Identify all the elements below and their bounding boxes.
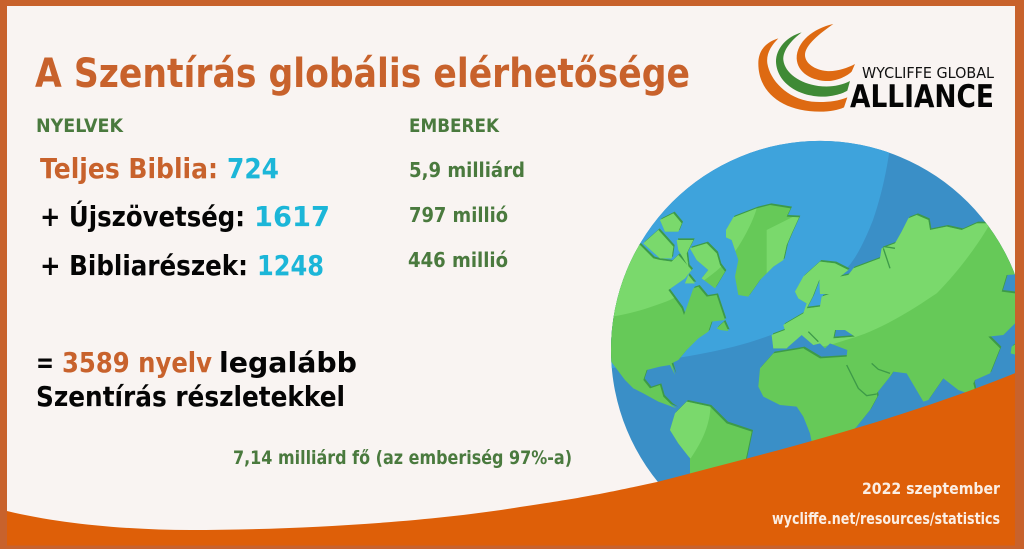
Bible portions row: + Bibliarészek: [40,249,248,282]
land highlight [614,208,988,458]
title: A Szentírás globális elérhetősége [35,51,690,97]
ocean highlight [600,130,892,370]
date: 2022 szeptember [862,479,1000,498]
New Testament row: + Újszövetség: [40,199,245,233]
ocean [611,140,1015,482]
Bible portions row: 1248 [257,249,324,282]
people: portions: 446 millió [408,248,508,272]
land [600,205,1024,477]
people: New Testament: 797 millió [409,203,508,227]
inland sea shadow lines [808,247,895,396]
total languages callout: = [36,346,54,379]
people column [408,115,525,272]
people: full Bible: 5,9 milliárd [409,158,525,182]
land shadow [601,203,1024,475]
total languages callout: Szentírás részletekkel [36,380,345,413]
orange swoosh [7,372,1018,549]
heading: people: EMBEREK [409,115,500,137]
logo: Wycliffe Global Alliance [758,24,995,115]
total people: 7,14 milliárd fő (az emberiség 97%-a) [233,447,572,469]
logo text: WYCLIFFE GLOBAL [862,64,995,82]
logo mark [758,24,855,112]
full Bible row: 724 [227,152,279,185]
heading: languages: NYELVEK [36,115,124,137]
logo: Wycliffe Global Alliance: ALLIANCE [850,79,994,115]
languages column [36,115,330,282]
New Testament row: 1617 [254,200,330,233]
total languages callout: 3589 nyelv [62,346,212,379]
globe [611,140,1015,482]
total languages callout [36,346,357,413]
full Bible row: Teljes Biblia: [40,152,218,185]
total languages callout: legalább [219,346,357,379]
